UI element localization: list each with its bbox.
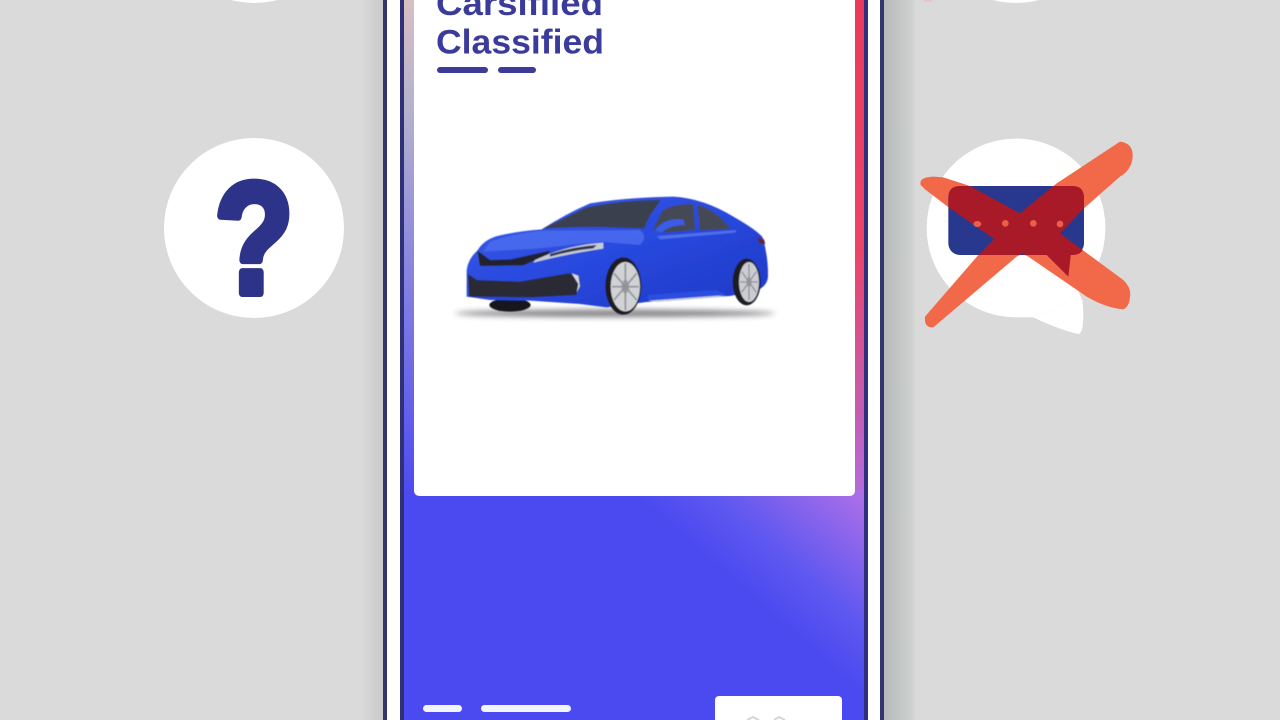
title underline dashes [437, 67, 536, 73]
tail light [757, 237, 765, 244]
phone [383, 0, 884, 720]
windshield [543, 200, 661, 229]
bubble dots [973, 220, 1063, 227]
rear side window [697, 205, 731, 231]
car body [467, 197, 768, 307]
no-messages icon [920, 139, 1133, 334]
car underside wheel [489, 298, 531, 312]
question mark icon: ? [214, 150, 294, 327]
ground shadow [455, 310, 775, 317]
upper grille [477, 251, 550, 266]
rear wheel [733, 259, 761, 305]
phone left shadow [362, 0, 384, 720]
front side window [653, 204, 695, 233]
door crease [657, 230, 737, 239]
question mark icon [164, 138, 344, 327]
hood highlight [483, 230, 644, 252]
message bubble [948, 186, 1084, 255]
dark red cross overlap [948, 186, 1084, 276]
infographic scene [164, 0, 1133, 720]
white speech circle [1016, 139, 1105, 334]
top right partial circle [926, 0, 1106, 3]
right gradient strip [854, 0, 864, 500]
phone frame [383, 0, 884, 720]
bottom left bars [423, 705, 571, 712]
title [436, 0, 604, 62]
sill [648, 295, 728, 302]
top red cross remnant [924, 0, 932, 2]
blue lower screen [404, 490, 864, 720]
bottom right button [715, 696, 842, 720]
front wheel [605, 257, 641, 315]
title: Classified [436, 24, 604, 62]
lower bumper grille [468, 273, 581, 297]
side mirror [655, 219, 685, 233]
orange cross [920, 142, 1133, 327]
headlight [533, 243, 603, 263]
left gradient strip [404, 0, 415, 500]
car image [455, 197, 775, 317]
white listing panel [414, 0, 855, 496]
top left partial circle [164, 0, 344, 3]
car artwork [467, 197, 768, 315]
phone right shadow [884, 0, 916, 720]
